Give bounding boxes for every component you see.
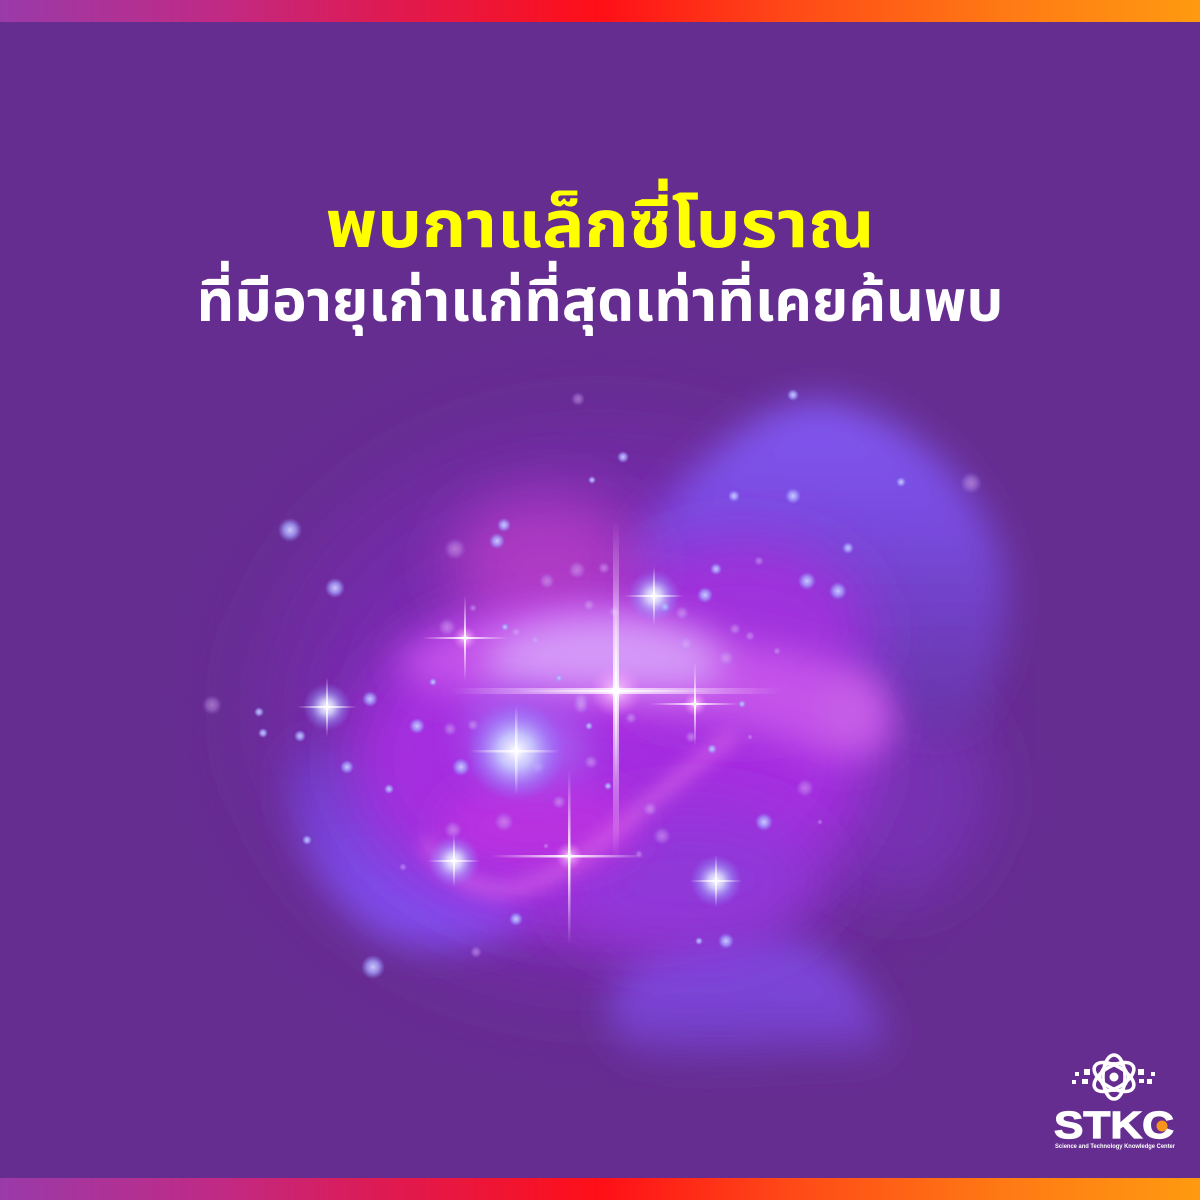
sparkle: large central star (450, 520, 782, 860)
title: yellow headline: พบกาแล็กซี่โบราณ (326, 187, 874, 261)
sparkle: pink star bottom (490, 770, 646, 945)
sparkle: star lower left (428, 835, 480, 887)
sparkle: blue star lower right (690, 855, 742, 907)
sparkle: pink star right (650, 662, 740, 746)
icon: atom emblem (1072, 1055, 1155, 1099)
logo wordmark: STKC (1054, 1105, 1174, 1147)
sparkle: blue star left (297, 677, 357, 737)
logo tagline: Science and Technology Knowledge Center (1055, 1144, 1176, 1150)
logo orange dot (1156, 1120, 1168, 1132)
subtitle: white headline: ที่มีอายุเก่าแก่ที่สุดเท่าที่เคยค้นพบ (197, 269, 1003, 334)
small out-of-focus stars (202, 389, 982, 979)
bottom gradient bar (0, 1178, 1200, 1200)
nebula clouds (270, 400, 1007, 1062)
sparkle: bright blue star with halo (466, 701, 566, 801)
top gradient bar (0, 0, 1200, 22)
sparkle: pink star upper left (422, 595, 508, 681)
sparkle: blue star top (624, 566, 684, 626)
logo: STKC (1054, 1055, 1176, 1150)
